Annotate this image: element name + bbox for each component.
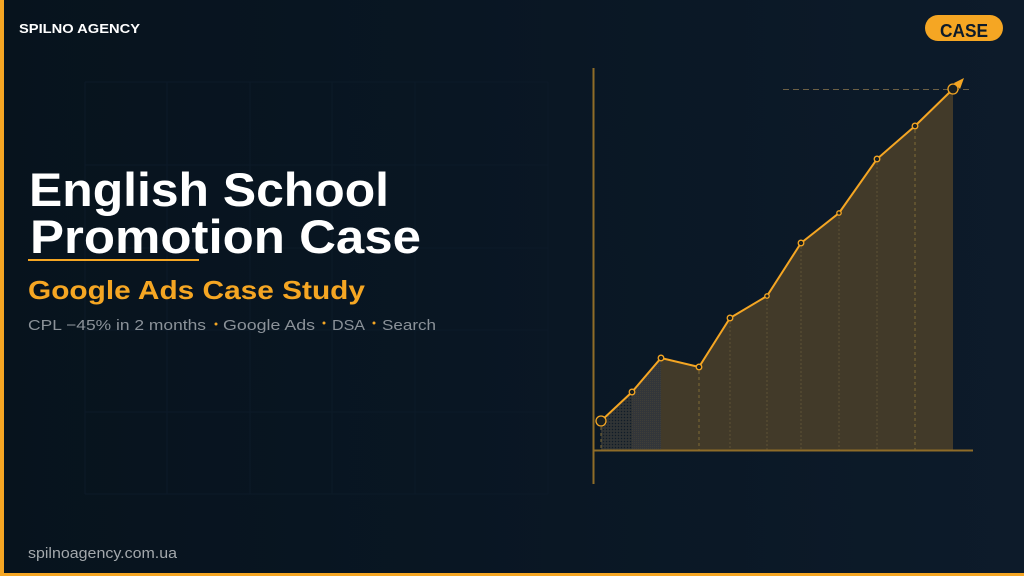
title: Promotion Case	[30, 210, 421, 263]
growth line	[601, 82, 960, 421]
badge: CASE	[925, 15, 1003, 41]
title underline	[28, 259, 199, 261]
tags line: Google Ads	[223, 317, 315, 334]
chart axes	[593, 68, 973, 484]
subtitle: Google Ads Case Study	[28, 275, 366, 305]
tags line	[28, 317, 436, 334]
chart drop lines	[601, 130, 915, 450]
tags line: DSA	[332, 317, 365, 334]
chart area fill	[601, 89, 953, 450]
arrowhead	[954, 78, 964, 89]
tags line: Search	[382, 317, 436, 334]
target dashed line	[783, 88, 972, 90]
line chart	[593, 68, 973, 484]
data points	[596, 84, 958, 426]
title	[29, 163, 421, 263]
title: English School	[29, 163, 389, 216]
website url: spilnoagency.com.ua	[28, 545, 178, 562]
badge: CASE: CASE	[940, 21, 988, 41]
tags line: CPL −45% in 2 months	[28, 317, 206, 334]
brand name: SPILNO AGENCY	[19, 21, 140, 36]
